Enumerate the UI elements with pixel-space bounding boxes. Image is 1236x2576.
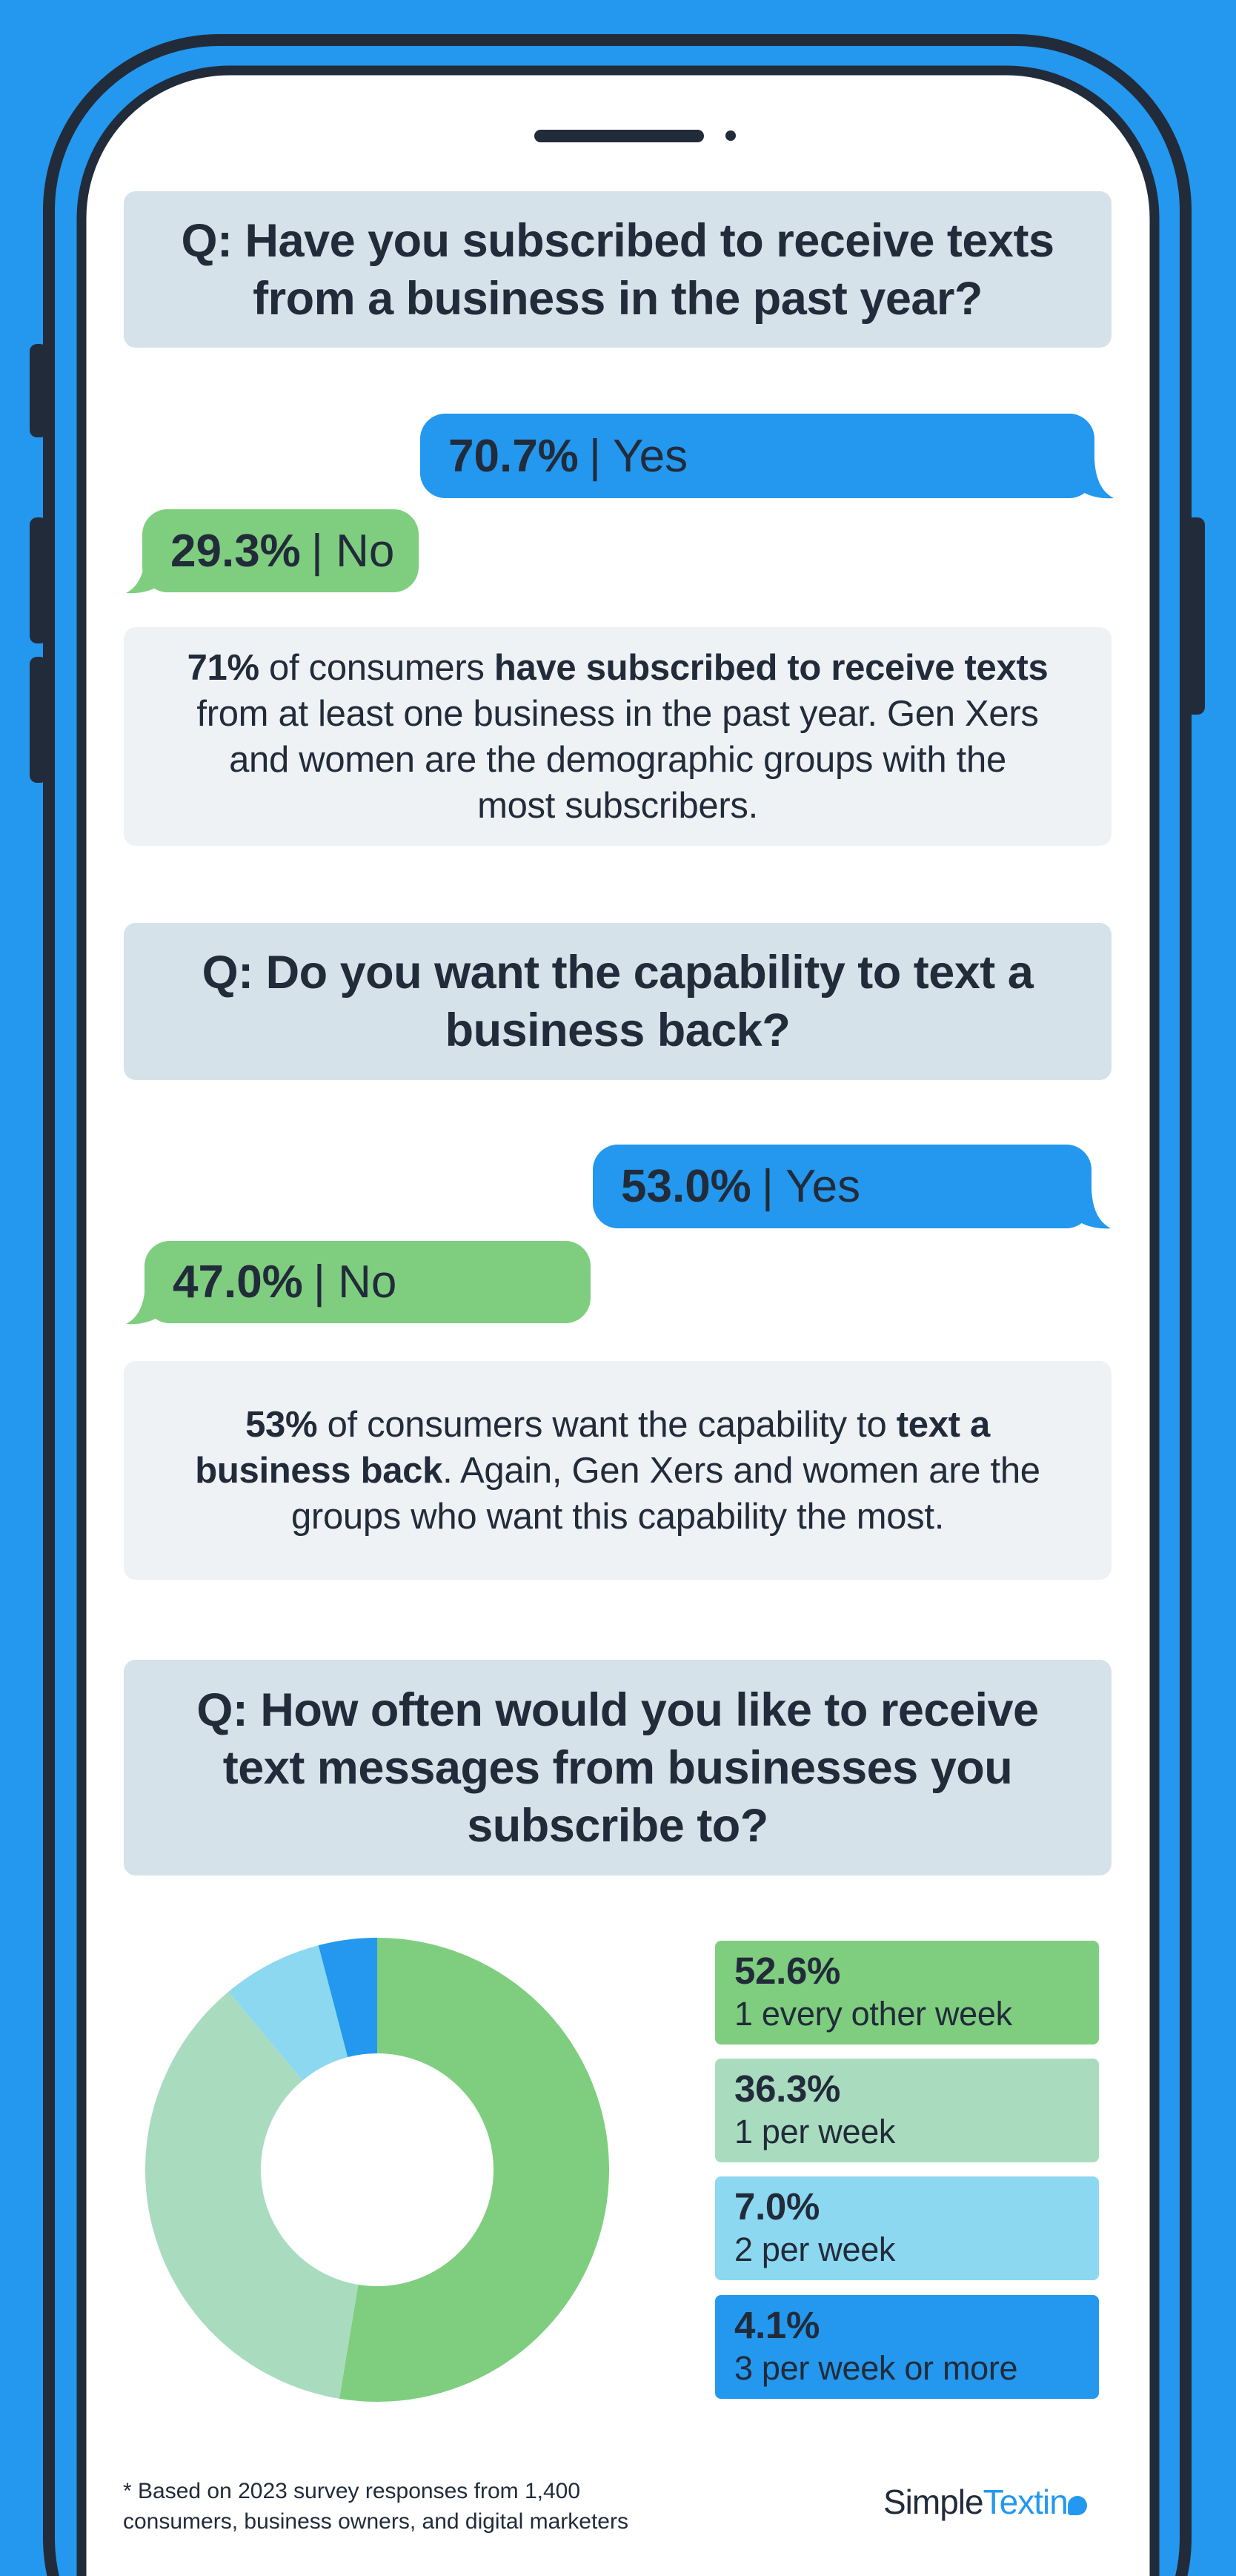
legend: 52.6%: 52.6% [734,1950,840,1992]
description 2: business back. Again, Gen Xers and women are the [195,1450,1040,1490]
bubble: yes 53.0% [593,1145,1092,1228]
legend: 7.0% [715,2176,1099,2280]
question 1: from a business in the past year? [253,273,983,325]
bubble: yes 53.0%: | Yes [762,1161,860,1212]
question 1: Q: Have you subscribed to receive texts [182,215,1054,267]
bubble: no 29.3%: | No [311,525,394,577]
legend: 7.0%: 2 per week [734,2231,895,2268]
question 2: business back? [445,1004,790,1056]
bubble: yes 70.7% [420,414,1094,498]
question 2: Q: Do you want the capability to text a [202,947,1033,999]
question 3: Q: How often would you like to receive [196,1684,1039,1736]
bubble: yes 70.7%: 70.7% [448,430,579,482]
legend: 4.1%: 4.1% [734,2304,820,2346]
bubble: no 47.0% [144,1241,591,1323]
legend: 52.6% [715,1941,1099,2044]
description 1: most subscribers. [477,786,758,826]
bubble: yes 70.7%: | Yes [589,430,688,482]
bubble: yes 53.0%: 53.0% [621,1161,751,1212]
question 3: text messages from businesses you [223,1742,1012,1794]
description 2 [124,1361,1112,1580]
description 1 [124,627,1112,846]
speaker [534,130,704,142]
description 1: from at least one business in the past year. Gen Xers [196,694,1039,734]
bubble: no 47.0%: 47.0% [173,1256,303,1308]
question 1 [124,191,1112,348]
description 2: groups who want this capability the most. [291,1496,944,1536]
legend: 36.3%: 36.3% [734,2067,840,2110]
description 2: 53% of consumers want the capability to text a [245,1404,990,1444]
footnote: consumers, business owners, and digital marketers [123,2509,628,2534]
legend: 52.6%: 1 every other week [734,1995,1012,2033]
legend: 4.1% [715,2295,1099,2399]
footnote [123,2479,628,2534]
legend: 7.0%: 7.0% [734,2185,820,2228]
legend: 36.3%: 1 per week [734,2113,895,2150]
logo: SimpleTexting: SimpleTextin [883,2483,1068,2521]
bubble tail [1085,460,1114,498]
bubble: no 29.3% [142,509,419,592]
question 3 [124,1660,1112,1875]
legend: 4.1%: 3 per week or more [734,2349,1017,2387]
legend: 36.3% [715,2059,1099,2162]
question 3: subscribe to? [467,1800,768,1852]
donut chart [145,1938,609,2402]
description 1: 71% of consumers have subscribed to receive texts [187,648,1048,688]
bubble: no 47.0%: | No [313,1256,396,1308]
description 1: and women are the demographic groups with the [229,740,1006,780]
question 2 [124,923,1112,1080]
bubble: no 29.3%: 29.3% [170,525,301,577]
footnote: * Based on 2023 survey responses from 1,400 [123,2479,580,2503]
